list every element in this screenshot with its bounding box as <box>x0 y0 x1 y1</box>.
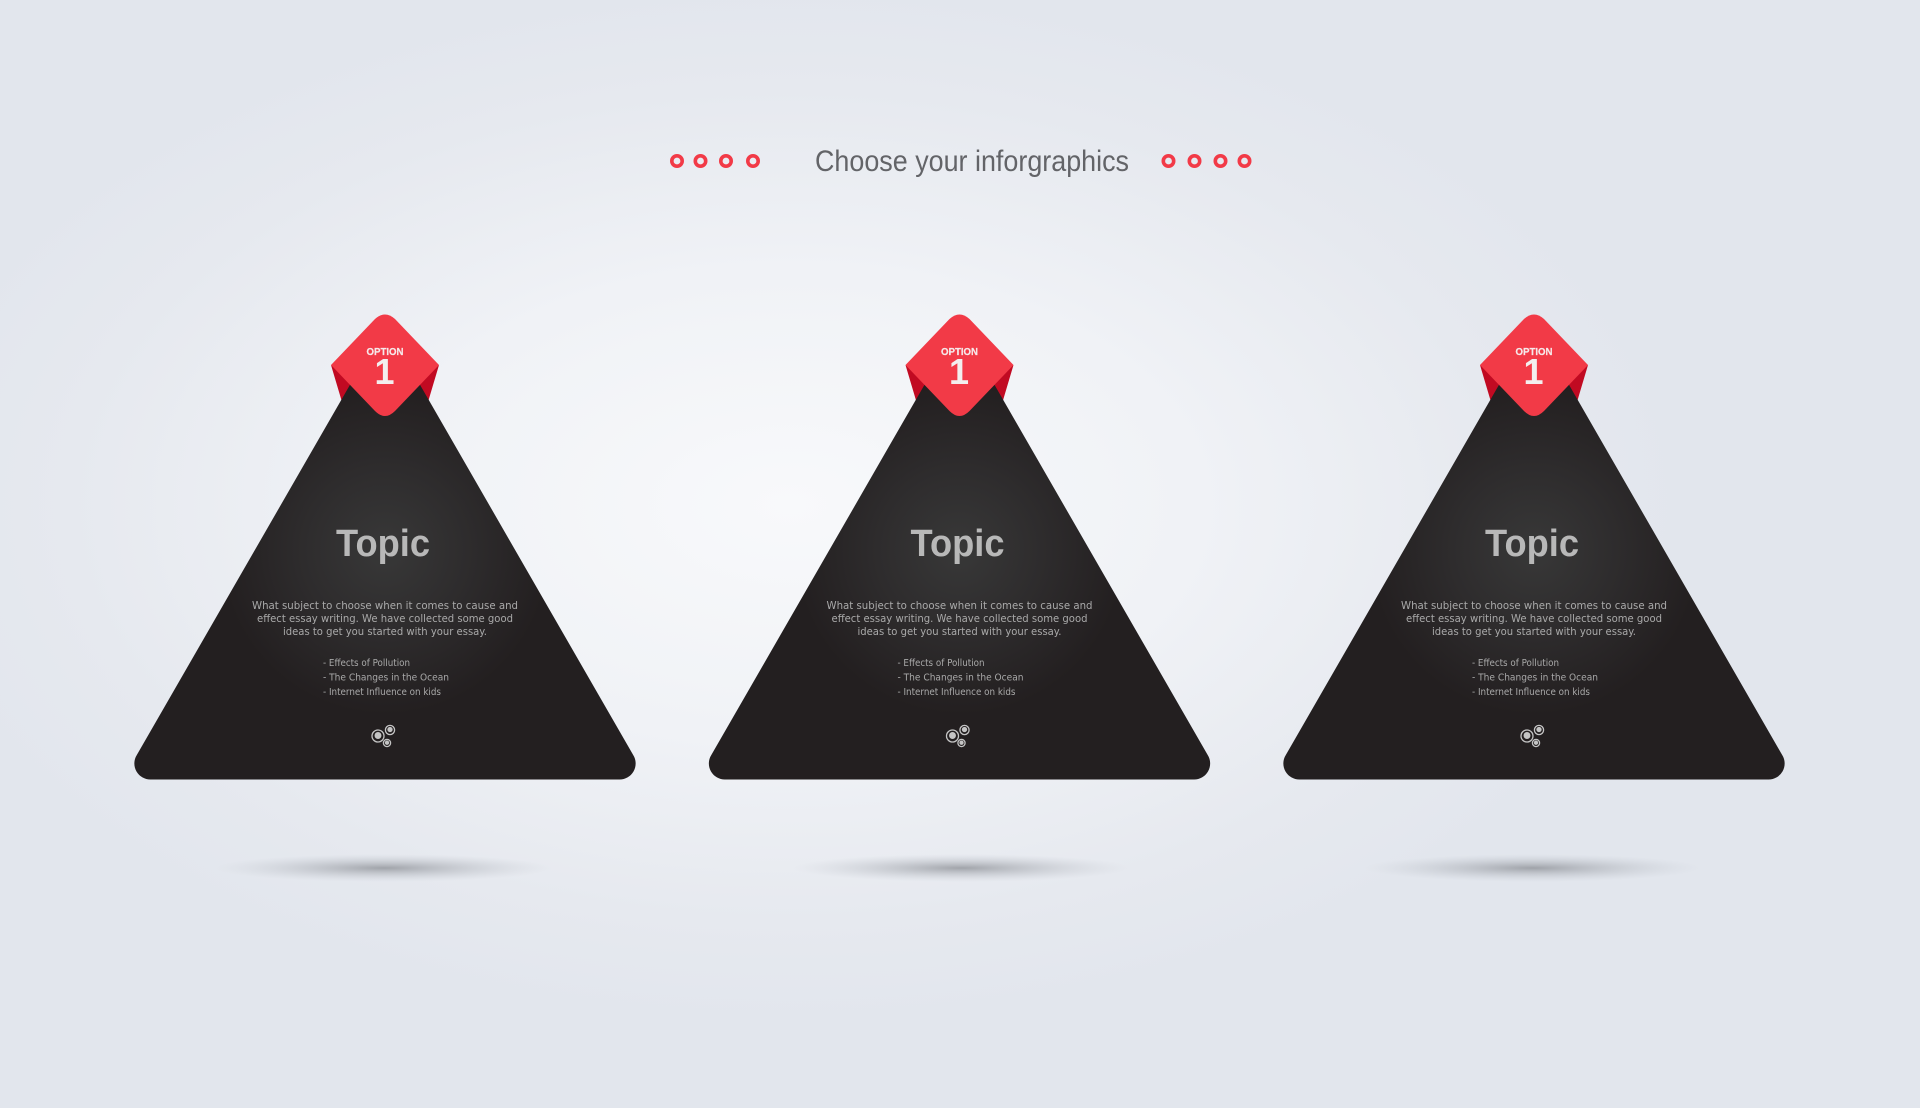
red folds <box>331 365 439 402</box>
description <box>252 599 518 638</box>
description: effect essay writing. We have collected some good <box>832 612 1088 625</box>
description <box>1401 599 1667 638</box>
right decorative dots <box>1163 156 1250 166</box>
dark triangle <box>134 324 636 780</box>
topic list <box>323 658 449 698</box>
description: ideas to get you started with your essay. <box>283 625 487 638</box>
topic list: - The Changes in the Ocean <box>1472 672 1598 684</box>
topic list <box>898 658 1024 698</box>
icon: people network <box>946 725 969 747</box>
topic list: - Effects of Pollution <box>1472 658 1559 669</box>
description: ideas to get you started with your essay. <box>858 625 1062 638</box>
floor shadow <box>216 854 552 882</box>
description: effect essay writing. We have collected some good <box>1406 612 1662 625</box>
topic list: - The Changes in the Ocean <box>898 672 1024 684</box>
dark triangle <box>1283 324 1785 780</box>
option label: OPTION <box>366 346 404 358</box>
red diamond <box>331 314 439 416</box>
panel: option card 1 <box>134 314 636 882</box>
red diamond <box>906 314 1014 416</box>
description: effect essay writing. We have collected some good <box>257 612 513 625</box>
topic list <box>1472 658 1598 698</box>
red folds <box>1480 365 1588 402</box>
description: What subject to choose when it comes to cause and <box>1401 599 1667 612</box>
description: What subject to choose when it comes to cause and <box>252 599 518 612</box>
topic heading: Topic <box>336 523 430 565</box>
topic list: - Effects of Pollution <box>898 658 984 669</box>
topic heading: Topic <box>910 523 1004 565</box>
topic heading: Topic <box>1485 523 1579 565</box>
red diamond <box>1480 314 1588 416</box>
option number: 1 <box>949 351 969 392</box>
description <box>826 599 1092 638</box>
header <box>672 145 1250 178</box>
topic list: - Effects of Pollution <box>323 658 410 669</box>
left decorative dots <box>672 156 758 166</box>
topic list: - Internet Influence on kids <box>1472 687 1590 698</box>
topic list: - The Changes in the Ocean <box>323 672 449 684</box>
title: Choose your inforgraphics <box>815 145 1129 178</box>
description: ideas to get you started with your essay. <box>1432 625 1636 638</box>
floor shadow <box>794 854 1130 882</box>
option number: 1 <box>374 351 395 392</box>
dark triangle <box>709 324 1210 780</box>
floor shadow <box>1365 854 1701 882</box>
topic list: - Internet Influence on kids <box>323 687 441 698</box>
description: What subject to choose when it comes to cause and <box>826 599 1092 612</box>
red folds <box>906 365 1014 402</box>
option number: 1 <box>1523 351 1544 392</box>
panel: option card 2 <box>709 314 1210 882</box>
panel: option card 3 <box>1283 314 1785 882</box>
topic list: - Internet Influence on kids <box>898 687 1016 698</box>
option label: OPTION <box>1516 346 1552 358</box>
icon: people network <box>1521 725 1544 747</box>
option label: OPTION <box>941 346 978 358</box>
icon: people network <box>372 725 395 747</box>
